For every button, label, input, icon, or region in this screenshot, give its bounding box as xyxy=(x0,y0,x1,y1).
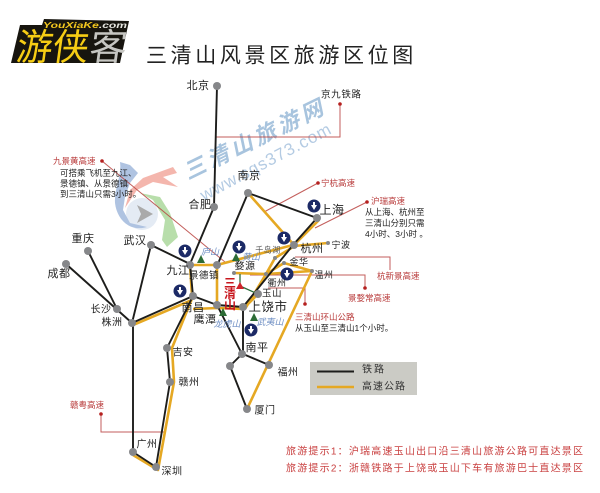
mountain markers xyxy=(197,253,258,321)
watermark: url: www.sqs373.com xyxy=(196,119,335,205)
scenic spot labels: 黄山 xyxy=(242,252,261,262)
city labels: 金华 xyxy=(289,256,309,267)
city labels: 南京 xyxy=(238,168,260,182)
Sanqingshan label: 清 xyxy=(224,286,236,301)
city labels: 福州 xyxy=(278,366,298,378)
scenic connector lines xyxy=(240,274,258,294)
scenic spot labels: 庐山 xyxy=(201,247,220,257)
city labels: 千岛湖 xyxy=(255,244,281,254)
city labels: 株洲 xyxy=(102,316,122,328)
Sanqingshan label xyxy=(224,276,236,312)
city labels: 广州 xyxy=(136,438,158,450)
city labels: 赣州 xyxy=(178,376,200,388)
callout dots xyxy=(99,102,369,416)
travel tips: 旅游提示1：沪瑞高速玉山出口沿三清山旅游公路可直达景区 xyxy=(286,444,583,458)
city labels: 上饶市 xyxy=(248,299,288,314)
city labels: 合肥 xyxy=(188,197,212,211)
city labels: 鹰潭 xyxy=(194,312,216,326)
callout: 沪瑞高速: 三清山分别只需 xyxy=(365,218,425,228)
city labels: 婺源 xyxy=(234,260,256,272)
city labels: 南昌 xyxy=(182,301,204,314)
city labels: 上海 xyxy=(319,202,345,217)
city nodes xyxy=(62,82,330,471)
callout: 三清山环山公路: 从玉山至三清山1个小时。 xyxy=(295,323,393,333)
city labels: 深圳 xyxy=(162,466,182,478)
city labels: 北京 xyxy=(186,78,210,92)
callout: 宁杭高速: 宁杭高速 xyxy=(321,178,356,188)
airport icons xyxy=(174,200,320,336)
city labels: 南平 xyxy=(246,341,268,354)
city labels: 杭州 xyxy=(300,241,324,255)
callout: 九景黄高速 xyxy=(53,156,141,199)
callout: 景婺常高速: 景婺常高速 xyxy=(348,293,391,303)
watermark: 三清山旅游网: 三清山旅游网 xyxy=(179,94,331,184)
callout leader lines xyxy=(101,104,390,432)
city labels: 重庆 xyxy=(72,231,94,245)
title: 三清山风景区旅游区位图 xyxy=(146,44,417,68)
callout: 赣粤高速: 赣粤高速 xyxy=(70,400,105,410)
callout: 九景黄高速: 景德镇、从景德镇 xyxy=(60,178,129,188)
callout: 京九铁路: 京九铁路 xyxy=(321,88,361,100)
callout: 九景黄高速: 可搭乘飞机至九江、 xyxy=(60,168,137,178)
callout: 杭新景高速: 杭新景高速 xyxy=(377,271,420,281)
callout: 沪瑞高速: 4小时、3小时 。 xyxy=(365,229,428,239)
city labels: 景德镇 xyxy=(189,270,219,282)
callout: 三清山环山公路: 三清山环山公路 xyxy=(295,312,355,322)
swirl emblem xyxy=(115,162,178,247)
city labels: 宁波 xyxy=(331,239,351,250)
logo: YouXiaKe: YouXiaKe .com xyxy=(43,20,128,30)
legend xyxy=(310,362,417,395)
callout: 九景黄高速: 到三清山只需3小时。 xyxy=(60,189,141,199)
city labels xyxy=(48,78,351,478)
city labels: 玉山 xyxy=(262,288,282,300)
legend: 高速公路 xyxy=(362,380,406,392)
city labels: 成都 xyxy=(48,267,70,280)
callout: 沪瑞高速 xyxy=(365,196,428,239)
legend: 铁路 xyxy=(362,362,386,376)
city labels: 厦门 xyxy=(254,404,276,416)
Sanqingshan label: 山 xyxy=(224,298,236,312)
travel tips xyxy=(286,444,583,474)
railway network xyxy=(66,86,317,467)
highway network xyxy=(133,193,328,470)
travel tips: 旅游提示2：浙赣铁路于上饶或玉山下车有旅游巴士直达景区 xyxy=(286,462,583,474)
city labels: 长沙 xyxy=(90,304,112,316)
callout: 三清山环山公路 xyxy=(295,312,393,333)
city labels: 吉安 xyxy=(172,346,194,358)
city labels: 九江 xyxy=(166,264,190,277)
callout: 沪瑞高速: 从上海、杭州至 xyxy=(365,207,425,217)
logo: YouXiaKe: 游侠 xyxy=(14,26,92,68)
city labels: 衢州 xyxy=(267,277,287,288)
icon: Sanqingshan red triangle xyxy=(236,282,244,289)
city labels: 温州 xyxy=(314,270,334,280)
callout: 沪瑞高速: 沪瑞高速 xyxy=(371,196,406,206)
scenic spot labels: 龙虎山 xyxy=(213,319,241,329)
callout: 九景黄高速: 九景黄高速 xyxy=(53,156,96,166)
city labels: 武汉 xyxy=(124,234,146,247)
Sanqingshan label: 三 xyxy=(224,276,236,290)
logo: YouXiaKe xyxy=(11,19,130,68)
scenic spot labels: 武夷山 xyxy=(256,317,284,327)
scenic spot labels xyxy=(201,247,284,329)
logo: YouXiaKe: 客 xyxy=(87,26,130,68)
